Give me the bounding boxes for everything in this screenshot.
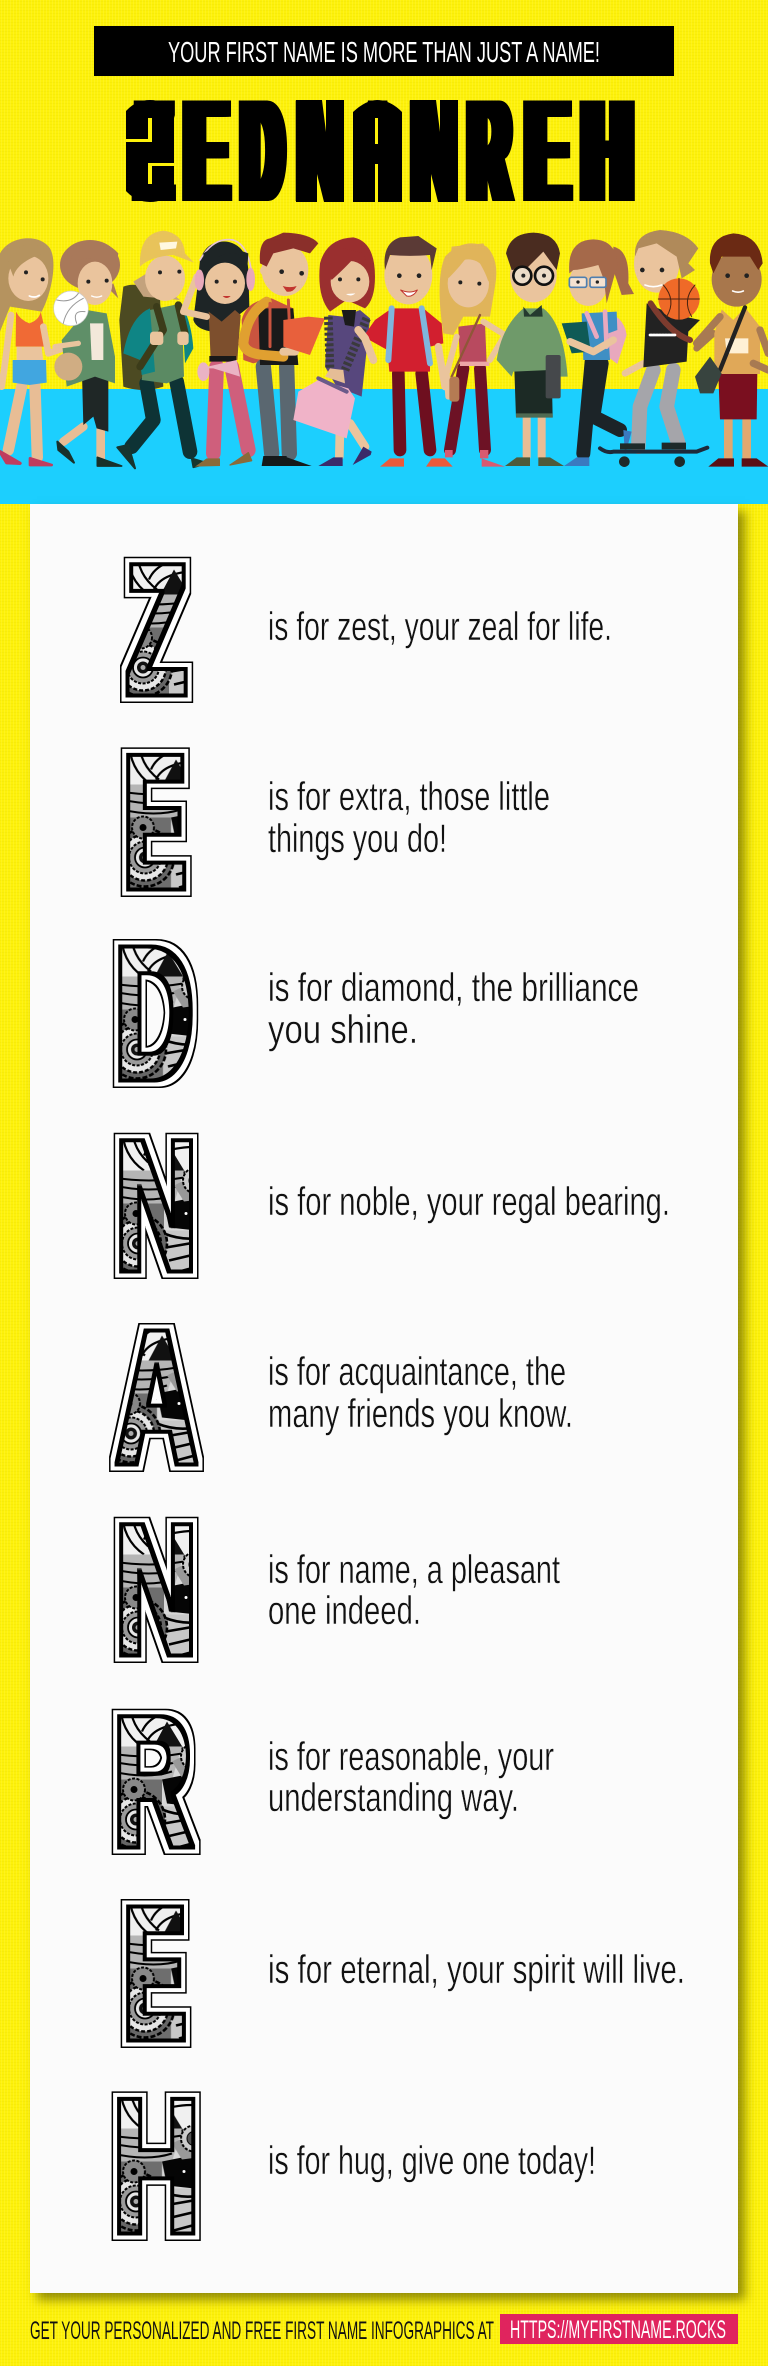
student: skateboarder with basketball [600, 230, 713, 467]
text: name: is for name, a pleasant [268, 1548, 560, 1592]
panel: white content card [30, 504, 738, 2293]
text: reasonable [268, 1735, 554, 1820]
letter R: R [114, 1679, 192, 1883]
student: girl in orange top [0, 238, 73, 465]
text: name: one indeed. [268, 1589, 421, 1633]
letter A: A [116, 1293, 197, 1502]
letter D: D [115, 910, 194, 1118]
text: extra: is for extra, those little [268, 775, 550, 819]
letter E: E [123, 719, 186, 927]
student: red haired girl with pink bag [293, 237, 375, 466]
text: diamond: is for diamond, the brilliance [268, 966, 639, 1010]
text: acquaintance [268, 1350, 573, 1436]
title: name: Z [130, 69, 164, 232]
text: name [268, 1548, 560, 1633]
student: girl with headphones [183, 240, 255, 467]
text: reasonable: is for reasonable, your [268, 1735, 554, 1779]
left six students [0, 231, 375, 468]
student: blonde girl with shoulder bag [440, 243, 505, 467]
text: reasonable: understanding way. [268, 1776, 519, 1820]
student: girl with ponytail, glasses and tablet [562, 239, 634, 466]
letter N second: N [116, 1489, 197, 1692]
text: zest: is for zest, your zeal for life. [268, 605, 612, 649]
title: name: N [406, 69, 446, 232]
title: name: H [575, 69, 623, 232]
title: name: N [292, 69, 332, 232]
title: name: A [355, 69, 389, 232]
student: boy with glasses and laptop [497, 233, 568, 466]
top banner [94, 26, 674, 76]
descriptions text block [268, 605, 685, 2183]
text: acquaintance: many friends you know. [268, 1392, 573, 1436]
title: name: D [235, 69, 276, 232]
letter Z: Z [126, 529, 187, 732]
student: boy with backpack and cap [117, 231, 208, 468]
title: name: E [178, 69, 219, 232]
text: extra: things you do! [268, 817, 447, 861]
text: acquaintance: is for acquaintance, the [268, 1350, 566, 1394]
right six students [358, 230, 768, 467]
title: name: R [462, 69, 503, 232]
title: name: E [519, 69, 560, 232]
text: hug: is for hug, give one today! [268, 2139, 596, 2183]
title block letter styling [126, 100, 458, 202]
student: boy in tank top with shoulder bag [695, 233, 768, 467]
text: diamond: you shine. [268, 1008, 418, 1052]
letter E second: E [123, 1871, 186, 2078]
letter H: H [113, 2063, 199, 2271]
student: boy reading a book [242, 233, 325, 466]
text: diamond [268, 966, 639, 1052]
student: boy in red shirt with backpack [358, 236, 453, 467]
group of students illustration [0, 230, 768, 470]
text: extra [268, 775, 550, 861]
student: girl with volleyball [54, 240, 122, 466]
title: name [130, 69, 635, 232]
blue floor band [0, 389, 768, 504]
letter N: N [116, 1105, 197, 1308]
